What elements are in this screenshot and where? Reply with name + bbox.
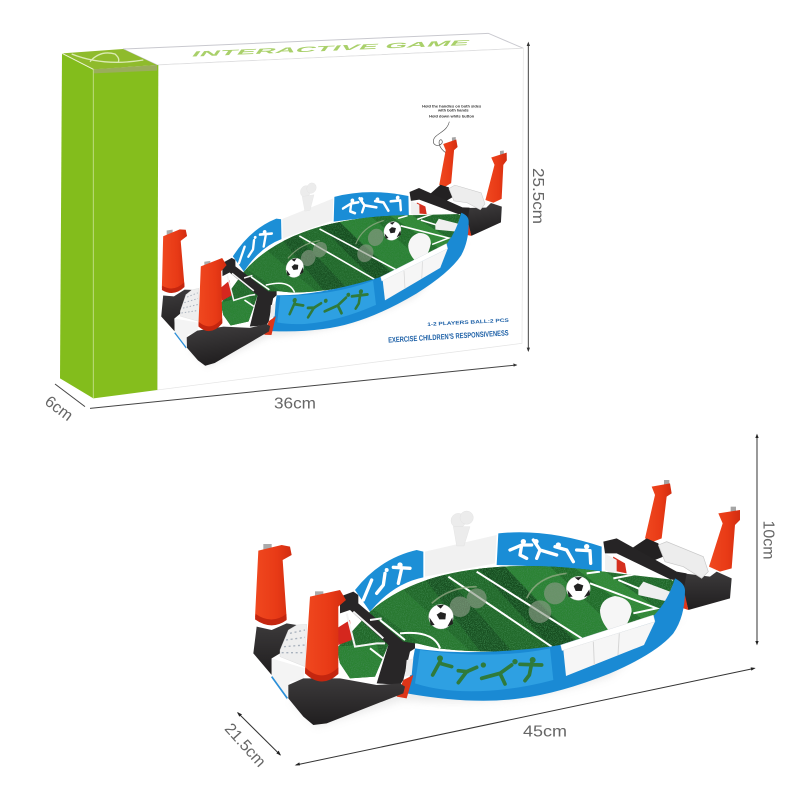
product height dimension (755, 434, 776, 645)
box depth dimension: 6cm (41, 393, 76, 425)
box bottom caption: 1-2 PLAYERS BALL:2 PCS (427, 318, 510, 328)
ghost balls (450, 582, 566, 623)
ball one (429, 604, 453, 629)
ball two (566, 576, 590, 600)
ground shadow (290, 617, 683, 727)
box height dimension: 25.5cm (529, 168, 546, 224)
front rim (407, 578, 685, 701)
left front handle (305, 590, 346, 682)
large product: football game (253, 480, 740, 727)
pitch (333, 560, 680, 683)
product box (41, 33, 546, 425)
product width dimension: 45cm (523, 724, 567, 741)
box top title: INTERACTIVE GAME (189, 39, 473, 59)
trophy ornament (451, 511, 473, 546)
left back base (253, 623, 297, 675)
product depth dimension (221, 712, 281, 771)
front wall player silhouettes (433, 655, 542, 684)
right base (683, 572, 732, 610)
box front face (157, 48, 523, 390)
left goal net (272, 620, 352, 700)
box width dimension: 36cm (274, 395, 316, 412)
box green side (60, 49, 158, 398)
box height dimension (527, 42, 546, 352)
white fence panel (561, 615, 655, 676)
box bottom caption: EXERCISE CHILDREN'S RESPONSIVENESS (388, 328, 509, 345)
box note text (422, 103, 482, 153)
box note text: Hold down white button (429, 113, 475, 118)
right goal net (658, 542, 708, 578)
goal posts (347, 612, 385, 647)
product width dimension (295, 667, 756, 765)
right frame (603, 538, 687, 592)
small product picture on the box (158, 129, 510, 374)
left back handle (255, 544, 292, 625)
box bottom caption (388, 318, 510, 345)
back wall players (363, 539, 591, 600)
box width dimension (90, 363, 517, 412)
white paddle (600, 596, 632, 643)
box note text: with both hands (437, 108, 469, 113)
back wall (355, 511, 602, 612)
right handles, base and net (603, 480, 740, 610)
grass texture (333, 560, 680, 683)
box note text: Hold the handles on both sides (422, 103, 482, 108)
box top face (123, 33, 523, 65)
left goal frame (340, 592, 415, 698)
front base (288, 678, 405, 725)
product height dimension: 10cm (759, 520, 776, 560)
box depth dimension (41, 384, 85, 425)
product depth dimension: 21.5cm (221, 720, 269, 771)
white plunger (638, 582, 670, 602)
